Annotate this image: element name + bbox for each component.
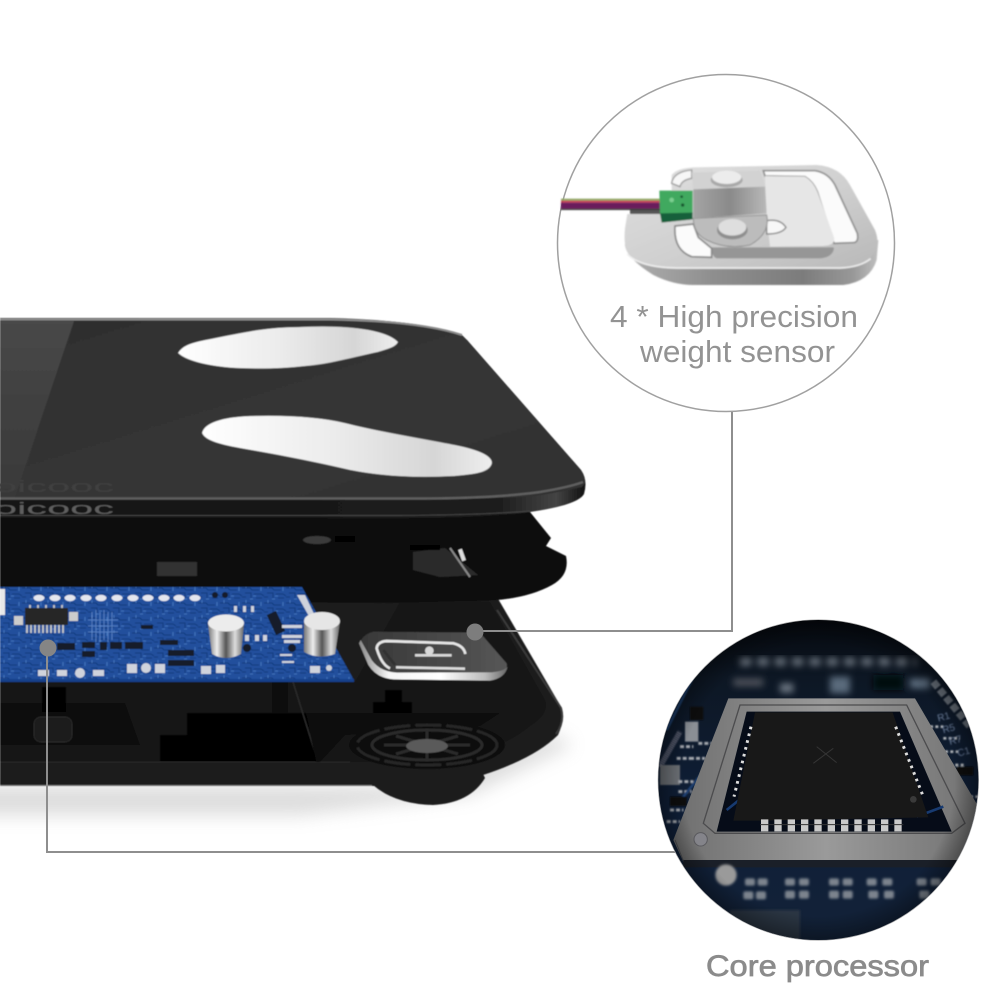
board background	[658, 620, 978, 940]
base shell	[0, 585, 563, 786]
trace cluster	[88, 610, 118, 642]
sensor plate side	[625, 240, 878, 285]
right board components: R1	[936, 711, 952, 725]
circuit board	[0, 587, 354, 682]
processor label: Core processor	[706, 950, 929, 983]
right hole	[767, 220, 786, 234]
LED pads	[34, 595, 200, 601]
small components	[57, 592, 296, 666]
chip cavity	[717, 712, 952, 832]
vignette	[658, 620, 978, 940]
green connector	[659, 191, 693, 214]
foot pad vent	[349, 721, 505, 769]
floor shadow	[0, 735, 572, 815]
processor photo circle	[658, 619, 979, 941]
processor die	[733, 712, 928, 821]
shell interior	[0, 602, 546, 762]
metal frame	[673, 698, 978, 862]
electrode lower	[202, 416, 492, 477]
sensor label	[610, 299, 858, 369]
block front	[693, 187, 767, 218]
capacitor right	[304, 612, 340, 657]
die mark	[813, 747, 837, 763]
mount plate	[360, 632, 507, 678]
blurred lower parts	[715, 864, 941, 943]
tongue	[765, 176, 834, 247]
slot	[763, 171, 858, 243]
sensor wires	[561, 199, 662, 214]
sensor label: 4 * High precision	[610, 299, 858, 334]
circle outline	[558, 74, 894, 412]
upper left slot	[672, 170, 692, 187]
middle layer	[0, 512, 567, 603]
chip pins bottom	[761, 819, 902, 831]
callout: weight sensor	[558, 74, 894, 412]
rubber foot	[373, 768, 485, 805]
scale assembly	[0, 318, 585, 805]
bolts	[711, 173, 743, 187]
leader line: weight sensor	[475, 410, 732, 631]
silver ring	[359, 640, 508, 681]
lower left hole	[675, 224, 712, 257]
left board components	[660, 677, 712, 822]
blurred top parts	[733, 662, 930, 693]
right board components: C1	[956, 746, 972, 760]
sensor plate top	[625, 165, 877, 267]
top plate	[0, 318, 585, 518]
marker dot: sensor	[466, 624, 484, 640]
round lug	[693, 215, 767, 247]
icon: load cell sensor	[561, 165, 878, 285]
marker dot: processor	[40, 640, 56, 656]
sensor label: weight sensor	[639, 334, 835, 369]
chip pins sides	[734, 727, 751, 797]
right board components	[930, 682, 978, 797]
sensor mount in base	[359, 632, 508, 681]
right board components: R5	[941, 722, 957, 736]
display panel	[0, 321, 74, 497]
block top	[692, 171, 765, 189]
callout: core processor	[650, 610, 990, 983]
microchip	[14, 605, 78, 633]
right board components: R7	[948, 734, 964, 748]
electrode upper	[178, 326, 398, 369]
capacitor left	[208, 614, 244, 658]
leader line: processor	[47, 650, 675, 852]
